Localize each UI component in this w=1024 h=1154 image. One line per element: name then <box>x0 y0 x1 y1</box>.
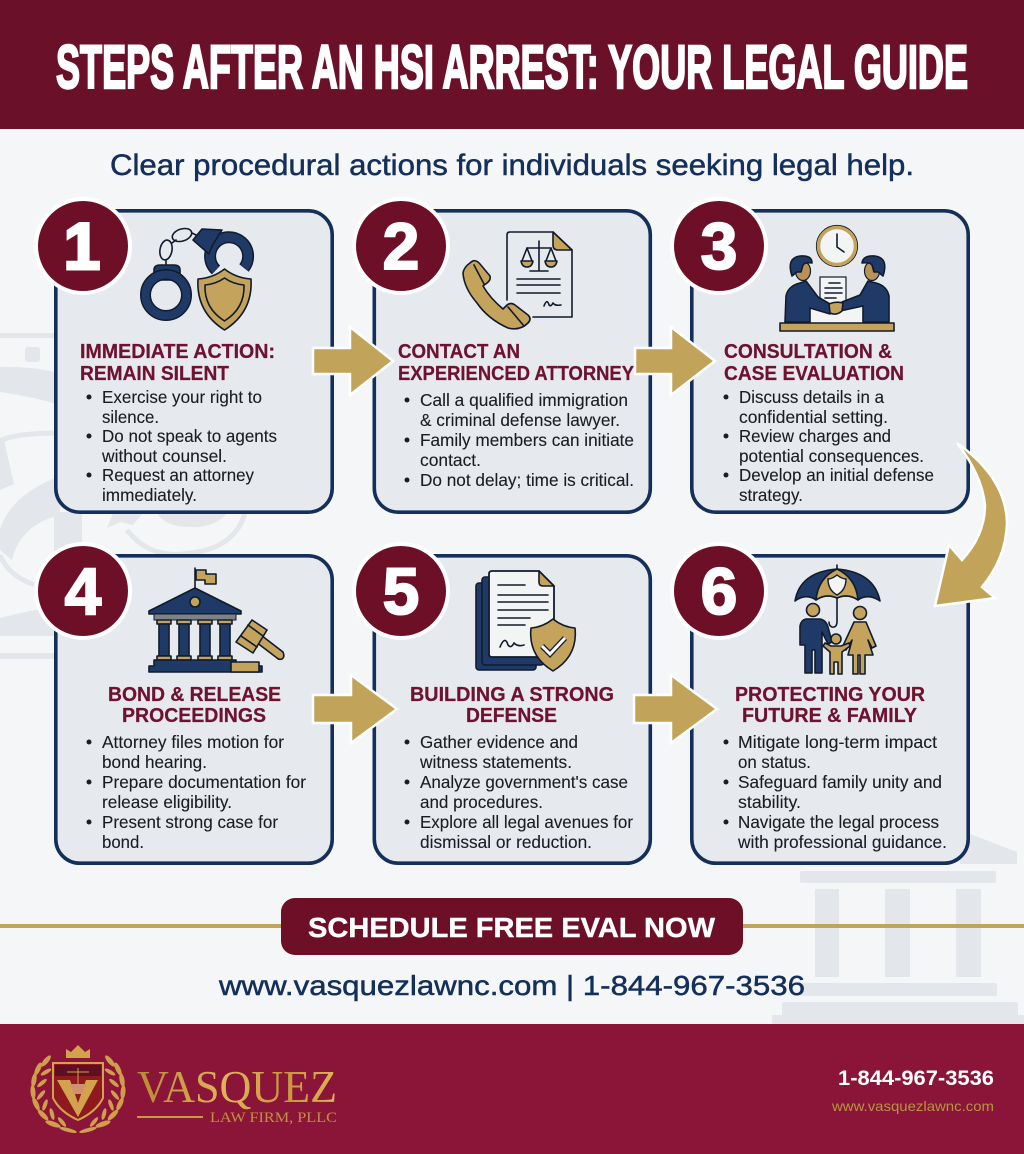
bullet list: on status. <box>738 752 811 772</box>
heading: CONTACT AN <box>398 341 520 363</box>
heading <box>398 341 635 385</box>
panel: step 5 <box>374 556 650 863</box>
icon: phone and legal document <box>463 232 572 329</box>
heading: BUILDING A STRONG <box>410 684 614 706</box>
bullet list: Review charges and <box>739 426 891 446</box>
bullet list: Do not speak to agents <box>102 426 277 446</box>
bullet list: Request an attorney <box>102 465 254 485</box>
arrow: step 2 to 3 <box>635 327 715 395</box>
bullet list: Exercise your right to <box>102 387 262 407</box>
logo: Vasquez Law Firm: LAW FIRM, PLLC <box>210 1110 337 1126</box>
heading: DEFENSE <box>466 705 557 727</box>
gold divider line <box>0 924 1024 928</box>
background watermark: left building fragments <box>0 333 245 659</box>
bullet list: and procedures. <box>420 792 543 812</box>
bullet list: bond hearing. <box>102 752 207 772</box>
number badge 1 <box>36 199 130 293</box>
number badge 5: 5 <box>383 554 419 628</box>
heading: REMAIN SILENT <box>80 363 229 385</box>
bullet list: Call a qualified immigration <box>420 390 628 410</box>
number badge 4: 4 <box>65 554 102 628</box>
panel: step 4 <box>56 556 332 863</box>
number badge 6 <box>672 544 766 638</box>
number badge 3 <box>672 199 766 293</box>
bullet list: Present strong case for <box>102 812 278 832</box>
heading <box>410 684 614 727</box>
bullet list: Mitigate long-term impact <box>738 732 937 752</box>
arrow: step 1 to 2 <box>313 327 393 395</box>
heading: IMMEDIATE ACTION: <box>80 341 275 363</box>
bullet list: contact. <box>420 450 481 470</box>
bullet list: Explore all legal avenues for <box>420 812 633 832</box>
bullet list: Attorney files motion for <box>102 732 284 752</box>
subtitle: Clear procedural actions for individuals seeking legal help. <box>110 149 914 182</box>
bullet list: confidential setting. <box>739 407 888 427</box>
number badge 2: 2 <box>383 209 419 283</box>
heading: BOND & RELEASE <box>108 684 281 706</box>
icon: family under umbrella <box>795 565 880 674</box>
bullet list <box>724 732 947 852</box>
number badge 6: 6 <box>701 554 737 628</box>
panel: step 1 <box>56 211 332 512</box>
icon: courthouse and gavel <box>149 568 284 672</box>
bullet list: with professional guidance. <box>737 832 947 852</box>
heading <box>80 341 275 385</box>
bullet list: Prepare documentation for <box>102 772 306 792</box>
bullet list: immediately. <box>102 485 197 505</box>
laurel wreath <box>30 1054 126 1134</box>
heading <box>108 684 281 727</box>
heading: CASE EVALUATION <box>724 363 904 385</box>
heading <box>724 341 904 385</box>
logo: Vasquez Law Firm: VASQUEZ <box>137 1062 337 1112</box>
number badge 4 <box>36 544 130 638</box>
bullet list: dismissal or reduction. <box>420 832 592 852</box>
bullet list: Gather evidence and <box>420 732 578 752</box>
panel: step 3 <box>692 211 968 512</box>
panel: step 2 <box>374 211 650 512</box>
arrow: step 3 to 6 curved <box>935 443 1007 606</box>
bullet list <box>404 390 634 490</box>
bullet list <box>404 732 633 852</box>
crest shield <box>53 1063 103 1120</box>
bullet list <box>86 732 306 852</box>
heading: FUTURE & FAMILY <box>742 705 918 727</box>
footer phone: 1-844-967-3536 <box>838 1067 994 1090</box>
icon: attorney consultation <box>780 226 894 331</box>
bullet list: stability. <box>738 792 801 812</box>
bullet list: & criminal defense lawyer. <box>420 410 620 430</box>
bullet list: Discuss details in a <box>739 387 884 407</box>
contact line: www.vasquezlawnc.com | 1-844-967-3536 <box>218 970 805 1001</box>
arrow: step 4 to 5 <box>313 675 397 743</box>
footer band <box>0 1024 1024 1154</box>
number badge 3: 3 <box>701 209 737 283</box>
icon: handcuffs and shield <box>146 226 251 330</box>
call to action button <box>281 898 743 955</box>
footer website: www.vasquezlawnc.com <box>831 1098 994 1114</box>
arrow: step 5 to 6 <box>634 675 717 743</box>
bullet list <box>724 387 934 505</box>
number badge 5 <box>354 544 448 638</box>
bullet list: Family members can initiate <box>420 430 634 450</box>
icon: documents and shield <box>476 571 575 671</box>
number badge 1: 1 <box>64 209 100 283</box>
logo: Vasquez Law Firm <box>30 1045 337 1134</box>
bullet list: Navigate the legal process <box>738 812 939 832</box>
panel: step 6 <box>692 556 968 863</box>
bullet list <box>86 387 277 505</box>
heading: CONSULTATION & <box>724 341 892 363</box>
heading <box>735 684 926 727</box>
call to action button: SCHEDULE FREE EVAL NOW <box>308 912 716 943</box>
bullet list: witness statements. <box>419 752 572 772</box>
bullet list: strategy. <box>739 485 803 505</box>
bullet list: release eligibility. <box>102 792 232 812</box>
bullet list: potential consequences. <box>739 446 924 466</box>
heading: PROTECTING YOUR <box>735 684 926 706</box>
bullet list: bond. <box>102 832 144 852</box>
background watermark: right courthouse <box>772 830 1024 1024</box>
bullet list: Do not delay; time is critical. <box>420 470 634 490</box>
bullet list: silence. <box>102 407 159 427</box>
title banner <box>0 0 1024 129</box>
heading: PROCEEDINGS <box>122 705 266 727</box>
crown <box>66 1045 90 1058</box>
bullet list: Develop an initial defense <box>739 465 934 485</box>
bullet list: Safeguard family unity and <box>738 772 942 792</box>
bullet list: without counsel. <box>101 446 227 466</box>
bullet list: Analyze government's case <box>420 772 628 792</box>
number badge 2 <box>354 199 448 293</box>
heading: EXPERIENCED ATTORNEY <box>398 363 635 385</box>
